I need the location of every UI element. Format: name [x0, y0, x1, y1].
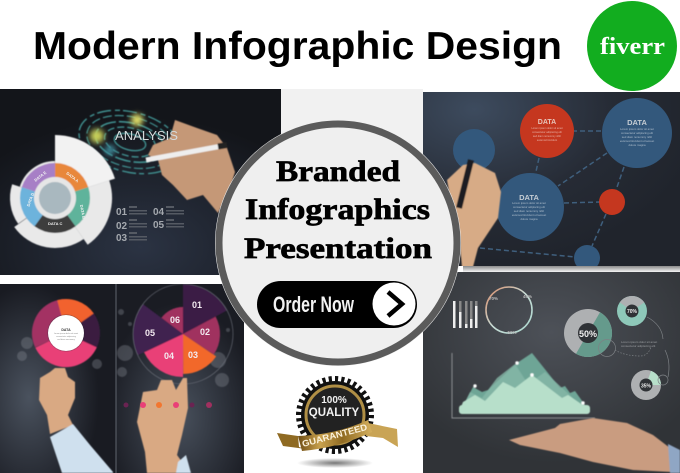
- badge headline: Branded: [276, 155, 400, 188]
- bubble: small blue bottom: [574, 245, 600, 266]
- right pie chart: [133, 284, 233, 384]
- donut segment labels: [26, 170, 86, 226]
- bubble: upper left blue: [453, 129, 495, 171]
- donut segment labels: DATA E: [33, 170, 48, 183]
- bubble: large blue data left: consectetur adipiscing elit: [513, 205, 545, 209]
- bubble: large blue data left: sed diam nonummy nibh: [514, 209, 545, 213]
- bubble: large blue data left: euismod tincidunt ut laoreet: [512, 213, 546, 217]
- pie segment numbers: 03: [188, 350, 198, 360]
- bubble: red data: euismod tincidunt: [537, 138, 557, 142]
- numbered list: [116, 206, 184, 244]
- bubble: red data: Lorem ipsum dolor sit amet: [531, 126, 563, 130]
- donut: 35 percent: 35%: [641, 384, 652, 390]
- left donut center label: sed diam nonummy: [57, 339, 75, 341]
- order now button: [257, 281, 417, 328]
- bubble: large blue data right: DATA: [627, 118, 647, 127]
- pie segment numbers: 06: [170, 315, 180, 325]
- bubble: red data: sed diam nonummy nibh: [533, 134, 562, 138]
- pie segment numbers: 05: [145, 328, 155, 338]
- colored ring segments: [20, 162, 90, 234]
- segmented donut chart: [16, 159, 94, 237]
- donut: 70 percent: [617, 296, 647, 326]
- bubble: large blue data left: dolore magna: [520, 217, 538, 221]
- numbered list: 01: [116, 207, 128, 218]
- right pointing hand: [137, 378, 191, 473]
- order now button: Order Now: [273, 292, 355, 317]
- panel: data bubble network: [423, 92, 680, 271]
- bubble: large blue data right: sed diam nonummy nibh: [622, 135, 653, 139]
- center strip background: [281, 89, 423, 279]
- timeline dots: [124, 402, 212, 408]
- open palm hand: [509, 418, 680, 473]
- white outer segments: [19, 162, 91, 234]
- numbered list: 04: [153, 207, 165, 218]
- top right panel lower shadow: [463, 266, 680, 272]
- connector lines and caption: consectetur adipiscing elit: [621, 344, 656, 348]
- donut segment labels: DATA D: [26, 192, 35, 207]
- bubble: large blue data right: euismod tincidunt ut laoreet: [620, 139, 654, 143]
- panel: analysis pie chart: [0, 89, 281, 275]
- bubble: large blue data right: [602, 98, 672, 168]
- left donut center label: [48, 315, 84, 351]
- vertical bar gauges: [453, 301, 478, 328]
- bubble: large blue data right: Lorem ipsum dolor sit amet: [620, 127, 654, 131]
- hand holding marker: [447, 160, 501, 267]
- analysis label: ANALYSIS: [115, 128, 178, 143]
- left donut center label: DATA: [61, 328, 71, 332]
- pie segment numbers: 02: [200, 327, 210, 337]
- hand holding pen: [146, 120, 235, 213]
- left donut center label: consectetur adipiscing: [56, 335, 76, 338]
- hologram analysis swirl: [78, 109, 172, 175]
- connector lines and caption: Lorem ipsum dolor sit amet: [621, 340, 657, 344]
- badge headline: [244, 155, 432, 265]
- donut: 70 percent: 70%: [627, 309, 638, 315]
- bubble: large blue data right: consectetur adipiscing elit: [621, 131, 653, 135]
- mountain area chart: [452, 353, 595, 418]
- bubble: large blue data right: dolore magna: [628, 143, 646, 147]
- bokeh sparkles: [17, 309, 230, 387]
- pie segment numbers: 01: [192, 300, 202, 310]
- pie segment numbers: 04: [164, 351, 174, 361]
- progress ring: 70%: [489, 296, 498, 301]
- progress ring: 40%: [523, 294, 532, 299]
- gold ribbon: [277, 433, 306, 449]
- donut: 50 percent: 50%: [579, 329, 597, 339]
- bubble: red data: consectetur adipiscing elit: [532, 130, 562, 134]
- bubble: large blue data left: DATA: [519, 193, 539, 202]
- quality guaranteed medal: QUALITY: [309, 407, 360, 419]
- ribbon text: GUARANTEED: [301, 422, 369, 449]
- bubble: large blue data left: [496, 173, 564, 241]
- donut segment labels: DATA A: [65, 171, 80, 184]
- swirl glow spots: [86, 110, 148, 158]
- numbered list: 03: [116, 233, 128, 244]
- quality guaranteed medal: [277, 379, 398, 468]
- connector lines and caption: [598, 317, 669, 385]
- donut: 50 percent: [564, 309, 612, 357]
- badge headline: Infographics: [245, 193, 430, 226]
- numbered list: 05: [153, 220, 165, 231]
- badge headline: Presentation: [244, 232, 432, 265]
- bubble: red data: DATA: [538, 119, 556, 126]
- dashed connectors: [480, 131, 624, 257]
- center circle badge: [215, 120, 461, 366]
- donut segment labels: DATA B: [79, 204, 86, 219]
- left pointing hand: [39, 368, 113, 473]
- progress ring: [486, 287, 532, 335]
- donut: 35 percent: [631, 370, 661, 400]
- numbered list: 02: [116, 221, 128, 232]
- left donut chart: [30, 297, 102, 369]
- fiverr logo badge: [587, 1, 677, 91]
- left donut center label: Lorem ipsum dolor sit amet: [54, 332, 79, 335]
- medal text: 100%: [321, 395, 347, 406]
- panel: pink pie charts with pointing hands: [0, 284, 244, 473]
- bubble: small red: [599, 189, 625, 215]
- pie segment numbers: [145, 300, 210, 361]
- donut segment labels: DATA C: [48, 221, 62, 226]
- panel: mountain chart with open hand: [423, 272, 680, 473]
- fiverr logo badge: fiverr: [600, 34, 665, 60]
- title: Modern Infographic Design: [33, 25, 562, 68]
- bubble: large blue data left: Lorem ipsum dolor sit amet: [512, 201, 546, 205]
- progress ring: 50%: [507, 330, 517, 335]
- bubble: red data: [520, 104, 574, 158]
